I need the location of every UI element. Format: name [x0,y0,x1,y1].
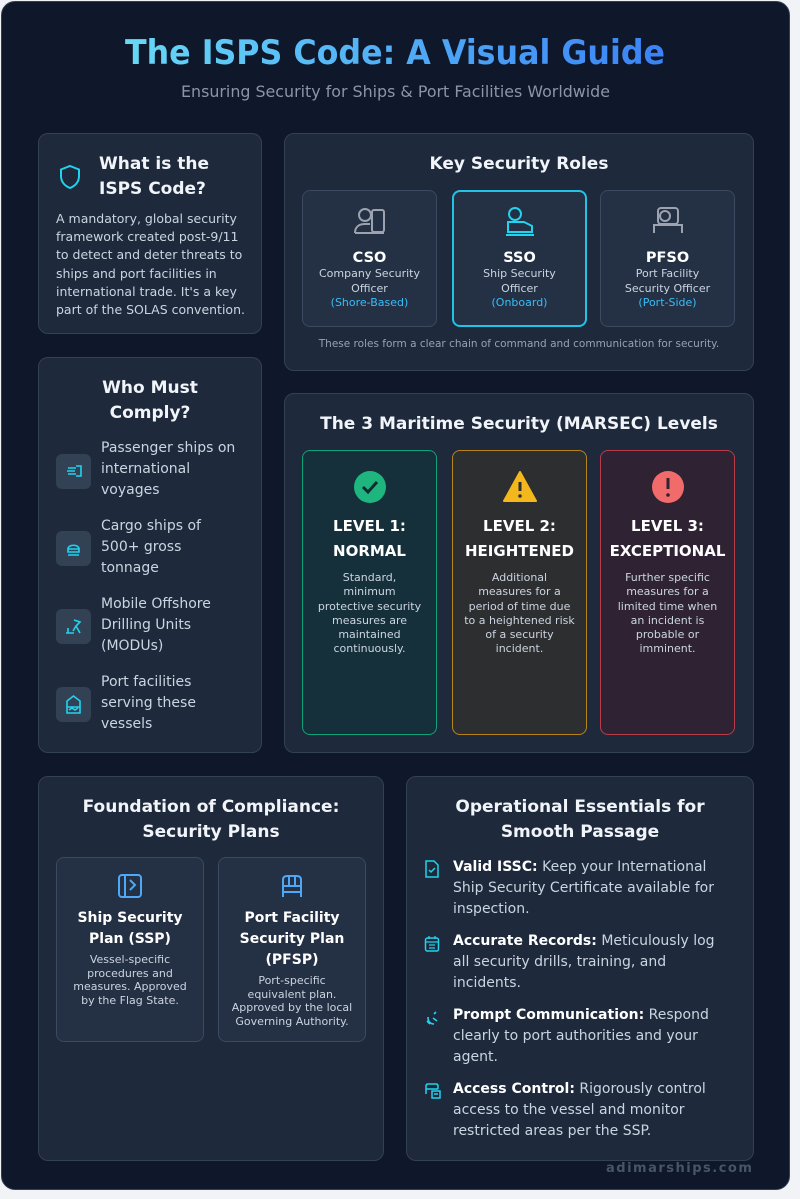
list: who: Port facilities serving these vessels [101,674,196,732]
plan: PFSP: Port Facility [244,910,340,926]
role: SSO [452,190,587,327]
plan: SSP: Plan (SSP) [89,931,171,947]
icon: shield [60,164,80,190]
panel: operational [406,776,754,1161]
panel: operational: Operational Essentials for [455,797,705,817]
level 3: Further specific measures for a limited time when an incident is probable or imminent. [618,571,717,655]
plan: SSP: Vessel-specific procedures and measures. Approved by the Flag State. [73,953,187,1007]
heading: ISPS Code? [99,179,206,199]
panel: operational: Smooth Passage [501,822,659,842]
plan: SSP: Ship Security [77,910,183,926]
panel: foundation: Foundation of Compliance: [83,797,339,817]
role: PFSO [600,190,735,327]
panel: foundation: Security Plans [142,822,280,842]
panel: who must comply: Comply? [110,403,190,423]
list: operational: Valid ISSC: Keep your International Ship Security Certificate available for inspection. [453,859,714,917]
level 1: LEVEL 1: [333,517,406,535]
list: operational: Accurate Records: Meticulously log all security drills, training, and incidents. [453,933,715,991]
role: PFSO: Security Officer [625,282,710,294]
level 1: continuously. [334,642,406,655]
role: SSO: SSO [503,250,536,266]
roles caption: These roles form a clear chain of command and communication for security. [319,338,719,350]
list: operational: Prompt Communication: Respond clearly to port authorities and your agent. [453,1007,709,1065]
level 2: LEVEL 2: [483,517,556,535]
list: operational: Access Control: Rigorously control access to the vessel and monitor restricted areas per the SSP. [453,1081,706,1139]
role: PFSO: PFSO [646,250,689,266]
level 3 [600,450,735,735]
heading: What is the [99,154,209,174]
level 1: measures are [332,614,407,627]
role: CSO: Officer [351,282,388,294]
role: SSO: Officer [501,282,538,294]
heading: Key Security Roles [430,154,608,174]
text: A mandatory, global security framework created post-9/11 to detect and deter threats to ships and port facilities in international trade. It's a key part of the SOLAS convention. [56,211,245,317]
level 1: NORMAL [333,542,406,560]
list: who: Passenger ships on international voyages [101,440,235,498]
panel: MARSEC: The 3 Maritime Security (MARSEC) Levels [320,414,718,434]
level 1: minimum [343,585,396,598]
panel: who must comply [38,357,262,753]
panel: foundation [38,776,384,1161]
level 3: LEVEL 3: [631,517,704,535]
level 2 [452,450,587,735]
level 2: HEIGHTENED [465,542,574,560]
plan: PFSP: Port-specific equivalent plan. Approved by the local Governing Authority. [232,974,352,1028]
plan: PFSP: Security Plan [240,931,344,947]
panel: what is [38,133,262,334]
plan: SSP [56,857,204,1042]
level 3: EXCEPTIONAL [610,542,725,560]
role: CSO [302,190,437,327]
list: who [56,440,235,732]
footer: adimarships.com [606,1161,753,1176]
level 1: Standard, [343,571,396,584]
level 1 [302,450,437,735]
role: PFSO: (Port-Side) [638,296,697,309]
plan: PFSP [218,857,366,1042]
level 2: Additional measures for a period of time due to a heightened risk of a security incident. [464,571,575,655]
heading [99,154,209,199]
level 1: maintained [338,628,401,641]
list: operational [424,859,715,1139]
title: The ISPS Code: A Visual Guide [125,33,665,73]
role: CSO: Company Security [319,267,420,280]
plan: PFSP: (PFSP) [266,952,318,968]
panel: roles [284,133,754,371]
role: CSO: (Shore-Based) [331,296,408,309]
role: SSO: (Onboard) [492,296,547,309]
panel: MARSEC [284,393,754,753]
title [125,33,665,101]
list: who: Mobile Offshore Drilling Units (MODUs) [101,596,211,654]
level 1: protective security [318,600,421,613]
panel: who must comply: Who Must [102,378,198,398]
list: who: Cargo ships of 500+ gross tonnage [101,518,201,576]
role: PFSO: Port Facility [636,267,699,280]
role: CSO: CSO [353,250,386,266]
title: Ensuring Security for Ships & Port Facilities Worldwide [181,82,610,101]
role: SSO: Ship Security [483,267,556,280]
